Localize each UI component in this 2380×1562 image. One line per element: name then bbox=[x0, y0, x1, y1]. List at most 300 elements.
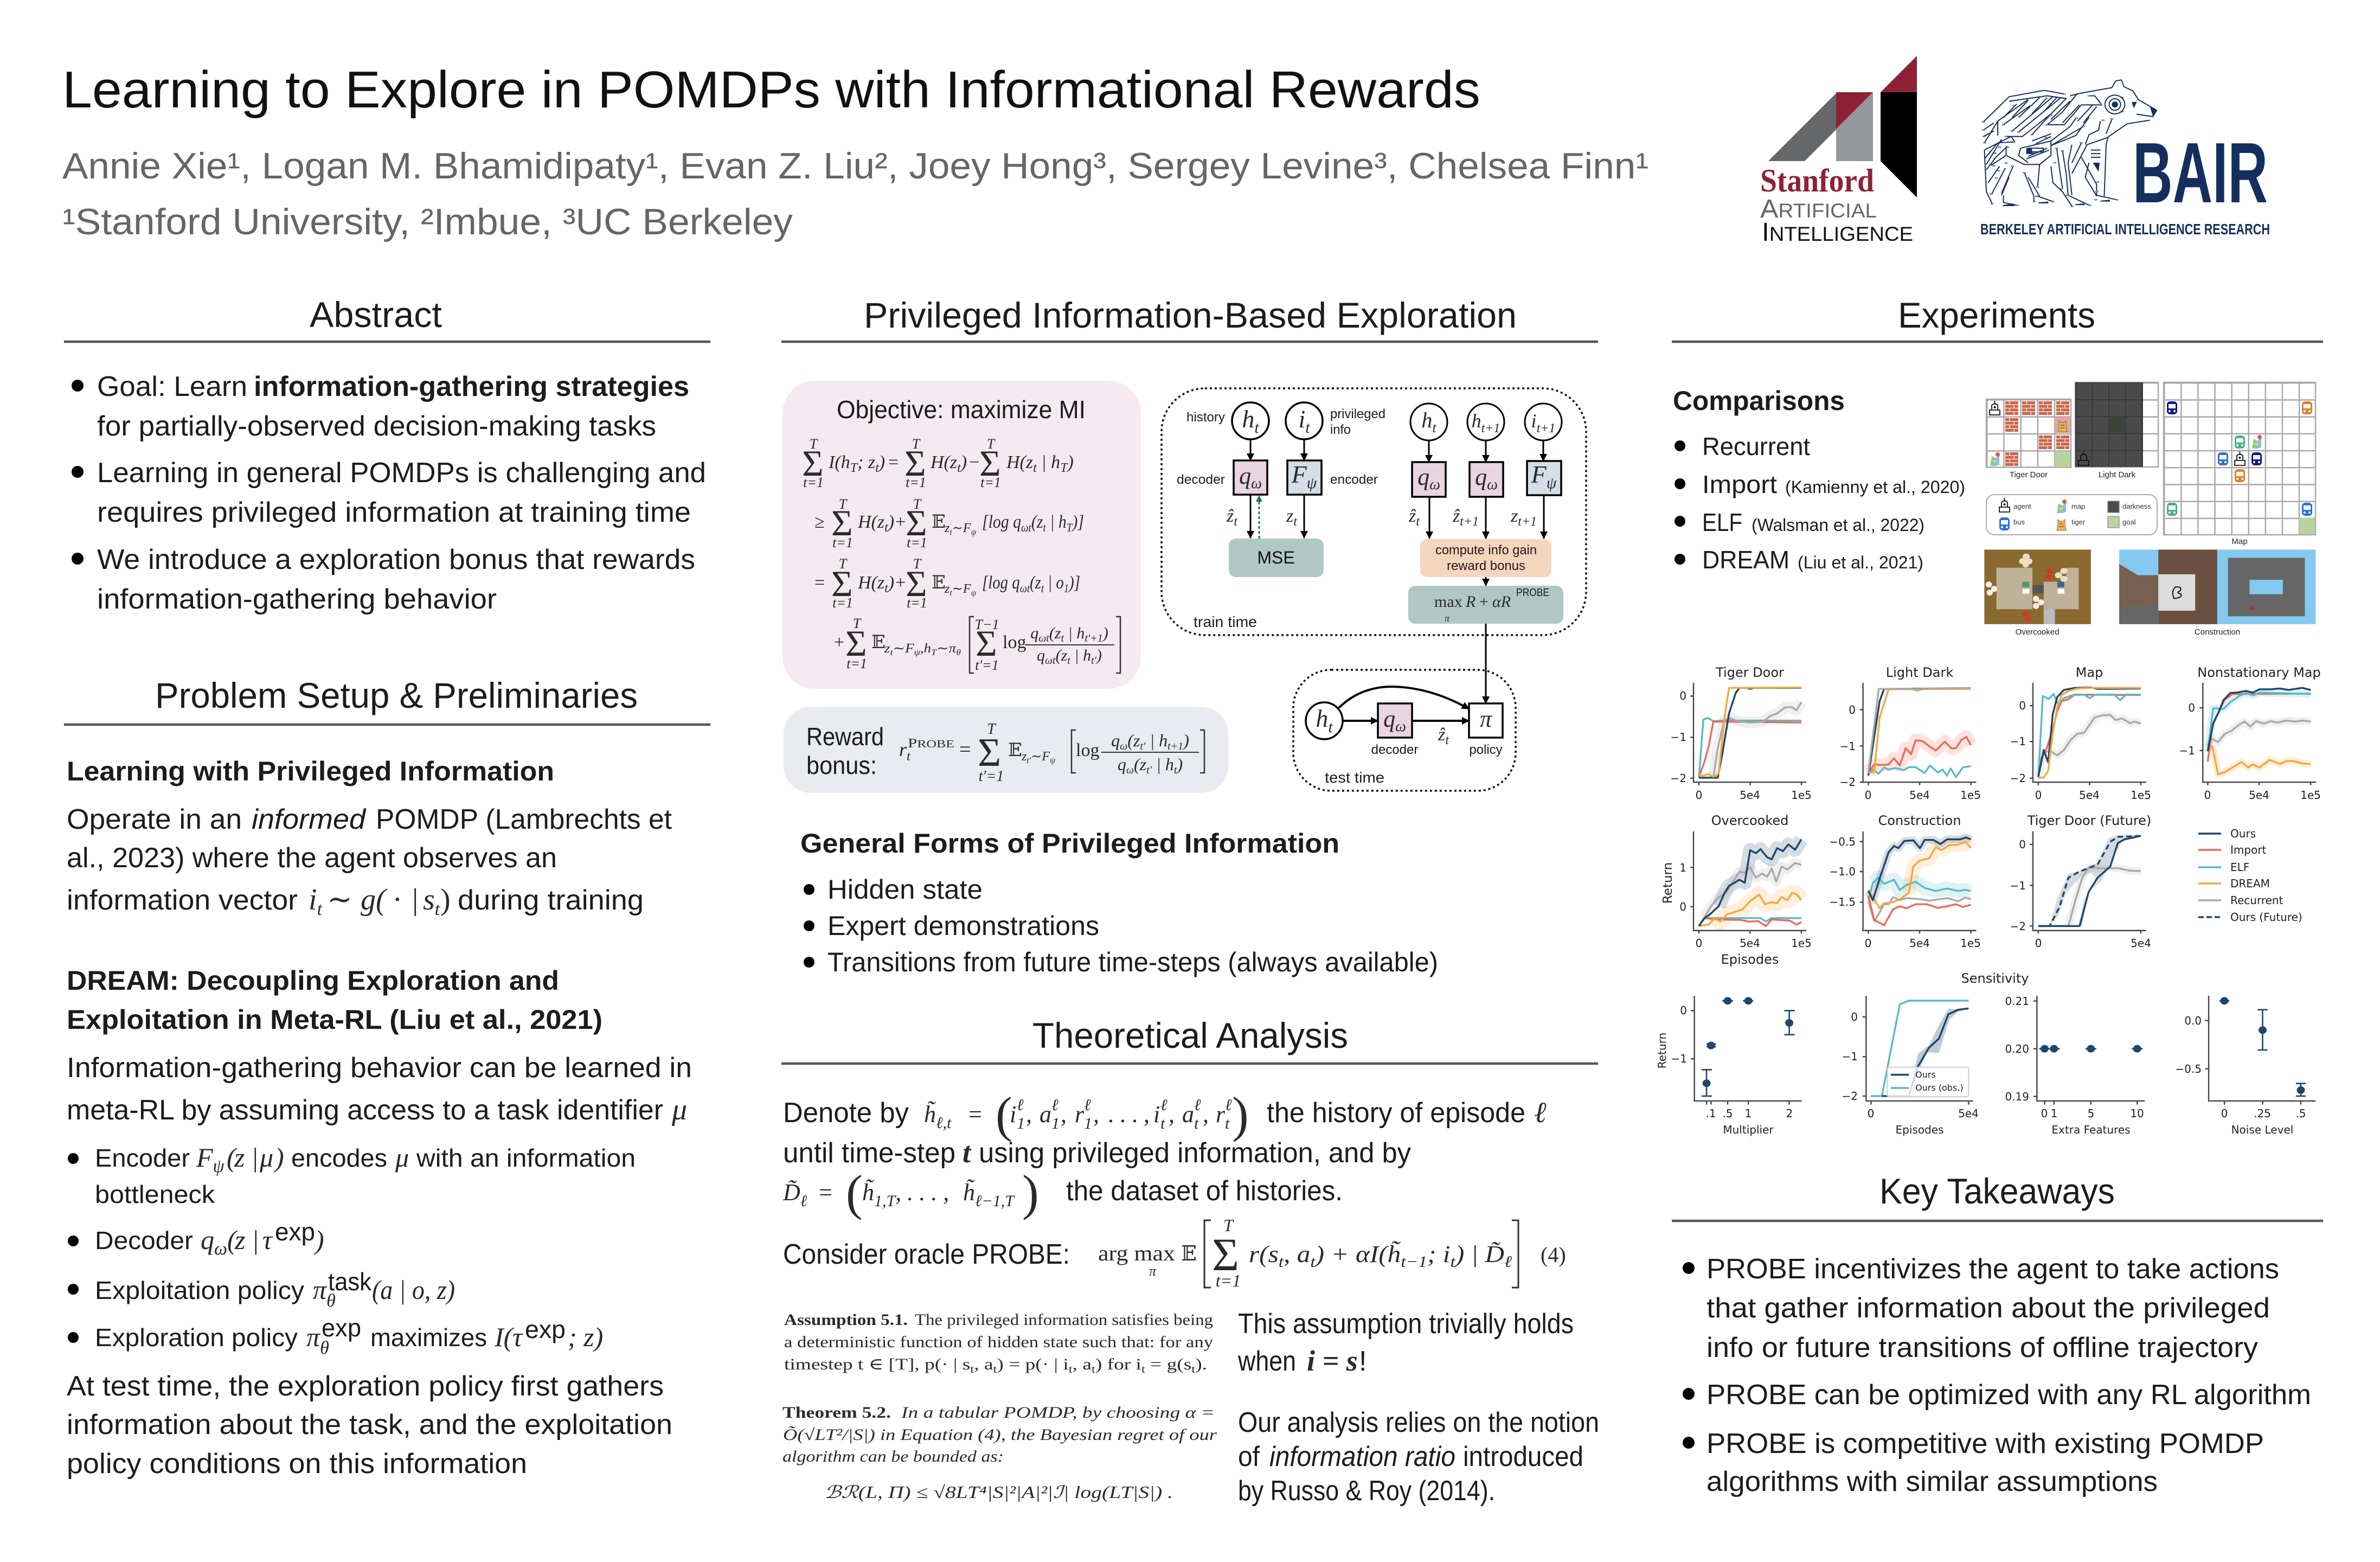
legend: environment icons bbox=[1986, 495, 2157, 535]
left pipeline: z bbox=[1286, 506, 1293, 526]
equation line 1: ) bbox=[1066, 452, 1074, 472]
chart: Nonstationary Map: Nonstationary Map bbox=[2197, 665, 2321, 680]
text block: key takeaways: algorithms with similar assumptions bbox=[1707, 1466, 2158, 1497]
text block: theorem 5.2: In a tabular POMDP, by choosing α = bbox=[901, 1404, 1215, 1422]
chart: Light Dark: 1e5 bbox=[1960, 789, 1981, 802]
chart: Tiger Door: 0 bbox=[1696, 789, 1702, 802]
chart: Light Dark: Light Dark bbox=[1886, 665, 1953, 680]
equation line 2: T bbox=[839, 496, 848, 512]
chart: Light Dark: −1 bbox=[1840, 740, 1856, 753]
list: DREAM components: Exploitation policy bbox=[95, 1276, 304, 1304]
equation line 4: ) bbox=[1095, 646, 1102, 664]
panel: reward bonus: ψ bbox=[1050, 756, 1056, 765]
text block: history definition: ℓ,t bbox=[936, 1114, 952, 1132]
text block: learning with privileged information: ) bbox=[440, 883, 451, 917]
chart: Overcooked: Return bbox=[1661, 862, 1675, 904]
logo: Stanford Artificial Intelligence bbox=[1760, 56, 1917, 247]
equation line 1: Σ bbox=[802, 443, 824, 484]
equation line 2: H(z bbox=[858, 512, 884, 532]
heading: Theoretical Analysis: Theoretical Analysis bbox=[1032, 1015, 1348, 1055]
text block: assumption 5.1: t bbox=[1191, 1363, 1196, 1375]
text block: learning with privileged information: ∼ bbox=[327, 883, 352, 917]
equation line 1: Σ bbox=[904, 443, 926, 484]
legend: algorithms: Ours bbox=[2230, 827, 2256, 840]
panel: reward bonus: t′ bbox=[1027, 756, 1031, 765]
left pipeline: h bbox=[1242, 405, 1254, 433]
chart: Nonstationary Map: 0 bbox=[2188, 701, 2195, 714]
equation line 4: Σ bbox=[976, 623, 997, 664]
equation line 1: t bbox=[957, 461, 961, 475]
text block: abstract bullets: requires privileged information at training time bbox=[97, 497, 691, 528]
list: DREAM components: maximizes bbox=[370, 1323, 487, 1352]
text block: assumption 5.1: , a bbox=[1073, 1355, 1092, 1373]
text block: oracle PROBE equation: π bbox=[1149, 1263, 1157, 1279]
equation line 1: t=1 bbox=[803, 475, 824, 490]
equation line 4: ωt bbox=[1038, 632, 1049, 644]
equation line 3: = bbox=[814, 573, 825, 593]
text block: oracle PROBE equation: ) + αI(h̃ bbox=[1313, 1241, 1401, 1267]
text block: learning with privileged information: g( bbox=[361, 883, 388, 917]
chart: Multiplier sensitivity: Multiplier bbox=[1723, 1123, 1774, 1136]
text block: learning with privileged information: information vector bbox=[67, 885, 298, 916]
equation line 4: 𝔼 bbox=[871, 632, 886, 652]
equation line 2: | h bbox=[1046, 512, 1067, 532]
right pipeline: reward bonus bbox=[1447, 559, 1525, 573]
equation line 3: 𝔼 bbox=[932, 573, 946, 593]
equation line 1: ) bbox=[960, 452, 967, 472]
text block: history definition: using privileged information, and by bbox=[979, 1137, 1411, 1169]
chart: Noise Level sensitivity: .5 bbox=[2295, 1107, 2306, 1120]
text block: learning with privileged information: POMDP (Lambrechts et bbox=[376, 804, 672, 835]
equation line 1: t bbox=[875, 461, 880, 475]
list: DREAM components: θ bbox=[326, 1291, 336, 1311]
text block: oracle PROBE equation: ) | D̃ bbox=[1453, 1241, 1504, 1267]
text block: key takeaways: info or future transitions of offline trajectory bbox=[1707, 1332, 2258, 1363]
equation line 2: t=1 bbox=[907, 535, 927, 550]
panel: objective maximize MI: Objective: maximize MI bbox=[837, 395, 1086, 424]
right pipeline: compute info gain bbox=[1435, 543, 1537, 558]
heading: Problem Setup & Preliminaries: Problem Setup & Preliminaries bbox=[155, 675, 638, 715]
text block: history definition: ℓ−1,T bbox=[975, 1192, 1015, 1210]
chart: Multiplier sensitivity: 1 bbox=[1745, 1107, 1752, 1120]
text block: history definition: i bbox=[1010, 1101, 1016, 1128]
right pipeline: i bbox=[1531, 410, 1537, 432]
text block: history definition: ℓ bbox=[1051, 1096, 1059, 1114]
text block: learning with privileged information: t bbox=[435, 899, 441, 919]
text block: learning with privileged information: al., 2023) where the agent observes an bbox=[67, 842, 557, 874]
panel: reward bonus: 𝔼 bbox=[1008, 740, 1022, 760]
right pipeline: t+1 bbox=[1460, 515, 1479, 529]
panel: reward bonus: ) bbox=[1176, 754, 1183, 774]
text block: history definition: = bbox=[968, 1101, 982, 1128]
chart: Light Dark: 5e4 bbox=[1909, 789, 1930, 802]
text block: history definition: 1 bbox=[1051, 1115, 1060, 1132]
text block: key takeaways: PROBE can be optimized with any RL algorithm bbox=[1707, 1379, 2311, 1411]
right pipeline: t+1 bbox=[1481, 421, 1500, 436]
chart: Noise Level sensitivity bbox=[2175, 996, 2315, 1136]
text block: history definition: ( bbox=[846, 1165, 863, 1220]
equation line 4: ) bbox=[1102, 624, 1108, 642]
equation line 1: T bbox=[1060, 461, 1068, 475]
chart: Noise Level sensitivity: Noise Level bbox=[2231, 1123, 2293, 1136]
text block: abstract bullets bbox=[72, 371, 706, 615]
text block: learning with privileged information: during training bbox=[458, 885, 644, 916]
equation line 3: + bbox=[895, 573, 906, 593]
right pipeline: ψ bbox=[1547, 474, 1557, 492]
equation line 2: ) bbox=[887, 512, 894, 532]
equation line 1: Σ bbox=[979, 443, 1001, 484]
list: DREAM components: Encoder bbox=[95, 1144, 190, 1172]
text block: DREAM: information about the task, and the exploitation bbox=[67, 1409, 672, 1441]
equation line 2: T bbox=[913, 496, 922, 512]
equation line 2: )] bbox=[1072, 512, 1084, 532]
equation line 1: H(z bbox=[931, 452, 957, 472]
right pipeline: t bbox=[1432, 420, 1436, 436]
text block: oracle PROBE equation: Consider oracle PROBE: bbox=[783, 1239, 1070, 1270]
text block: history definition: ℓ bbox=[1225, 1096, 1232, 1114]
text block: key takeaways: that gather information about the privileged bbox=[1707, 1292, 2270, 1324]
list: DREAM components: | bbox=[252, 1225, 259, 1255]
equation line 1: T bbox=[850, 461, 858, 475]
text block: general forms of privileged information bbox=[800, 828, 1438, 977]
panel: objective maximize MI bbox=[782, 381, 1141, 689]
chart: Tiger Door (Future): 0 bbox=[2035, 937, 2042, 950]
panel: reward bonus: T bbox=[987, 721, 997, 738]
equation line 3: t bbox=[950, 588, 952, 598]
panel: reward bonus: (z bbox=[1134, 754, 1147, 774]
text block: assumption 5.1: The privileged information satisfies being bbox=[915, 1311, 1213, 1329]
text block: oracle PROBE equation bbox=[783, 1215, 1566, 1290]
equation line 3: ) bbox=[887, 573, 894, 593]
text block: history definition: a bbox=[1182, 1101, 1194, 1128]
list: DREAM components: τ bbox=[262, 1225, 273, 1255]
text block: theorem 5.2: Õ(√LT²/|S|) in Equation (4), the Bayesian regret of our bbox=[783, 1426, 1217, 1444]
chart: Noise Level sensitivity: −0.5 bbox=[2175, 1062, 2202, 1076]
diagram: test time: t bbox=[1445, 733, 1449, 747]
list: DREAM components: ( bbox=[227, 1225, 238, 1255]
chart: Tiger Door: −1 bbox=[1671, 731, 1686, 744]
equation line 2 bbox=[814, 496, 1084, 550]
text block: assumption note bbox=[1237, 1308, 1574, 1377]
equation line 1: ) bbox=[878, 452, 885, 472]
right pipeline: ẑ bbox=[1453, 506, 1460, 526]
chart: Episodes sensitivity: 0 bbox=[1851, 1010, 1858, 1023]
list: DREAM components: z bbox=[234, 1142, 245, 1173]
text block: history definition: t bbox=[1160, 1115, 1165, 1132]
list: DREAM components: ψ bbox=[213, 1156, 225, 1176]
diagram: train time bbox=[1162, 388, 1586, 635]
list: DREAM components: | bbox=[251, 1142, 259, 1173]
diagram: test time: q bbox=[1383, 706, 1395, 732]
equation line 1: t=1 bbox=[906, 475, 926, 490]
chart: Map: Map bbox=[2076, 665, 2103, 680]
equation line 3: )] bbox=[1068, 573, 1080, 593]
panel: reward bonus: t bbox=[907, 750, 911, 764]
list: DREAM components: ) bbox=[273, 1142, 284, 1173]
list: DREAM components: ; z) bbox=[568, 1322, 603, 1352]
text block: DREAM: DREAM: Decoupling Exploration and bbox=[67, 965, 559, 996]
equation line 1: t bbox=[1033, 461, 1037, 475]
equation line 1 bbox=[802, 436, 1074, 490]
chart: Map: 5e4 bbox=[2079, 789, 2100, 802]
right pipeline: π bbox=[1445, 613, 1450, 624]
equation line 3: | o bbox=[1044, 573, 1064, 593]
equation line 4: t′ bbox=[1091, 655, 1097, 667]
logo: BAIR bear: BAIR bbox=[2133, 125, 2268, 221]
equation line 3: Σ bbox=[906, 563, 927, 604]
right pipeline: ω bbox=[1429, 476, 1440, 493]
text block: assumption 5.1: ) = p(· | i bbox=[997, 1355, 1069, 1373]
right pipeline: t bbox=[1416, 515, 1420, 529]
text block: history definition: , bbox=[1093, 1101, 1099, 1128]
list: DREAM components: encodes bbox=[291, 1144, 387, 1172]
text block: learning with privileged information bbox=[67, 756, 672, 919]
equation line 4: T−1 bbox=[974, 617, 999, 632]
text block: comparisons: Import bbox=[1702, 470, 1777, 498]
panel: reward bonus bbox=[784, 707, 1228, 793]
text block: history definition: r bbox=[1216, 1101, 1226, 1128]
text block: DREAM: Exploitation in Meta-RL (Liu et al., 2021) bbox=[67, 1004, 602, 1035]
text block: history definition: ℓ bbox=[1084, 1096, 1091, 1114]
equation line 3: 1 bbox=[1064, 581, 1069, 595]
heading: Experiments: Experiments bbox=[1898, 295, 2095, 335]
text block: oracle PROBE equation: t bbox=[1279, 1253, 1284, 1271]
panel: reward bonus: Reward bbox=[806, 722, 884, 751]
text block: comparisons: (Liu et al., 2021) bbox=[1798, 553, 1923, 572]
right pipeline: t+1 bbox=[1518, 515, 1537, 529]
equation line 1: T bbox=[912, 436, 921, 452]
equation line 4: | h bbox=[1064, 624, 1085, 642]
chart: Noise Level sensitivity: 0.0 bbox=[2184, 1014, 2202, 1027]
logo: Stanford Artificial Intelligence: INTELLIGENCE bbox=[1762, 218, 1913, 247]
equation line 3: H(z bbox=[858, 573, 884, 593]
text block: theorem note bbox=[1238, 1407, 1599, 1507]
left pipeline: t bbox=[1254, 419, 1259, 437]
chart: Construction bbox=[1829, 813, 1981, 950]
right pipeline bbox=[1408, 404, 1563, 624]
chart: Construction: Construction bbox=[1878, 813, 1961, 828]
text block: oracle PROBE equation: r(s bbox=[1249, 1241, 1275, 1267]
text block: key takeaways: PROBE is competitive with existing POMDP bbox=[1707, 1428, 2264, 1459]
equation line 4: t bbox=[890, 648, 893, 657]
equation line 4 bbox=[834, 616, 1120, 673]
equation line 3: z bbox=[945, 582, 950, 596]
text block: history definition: h̃ bbox=[924, 1101, 936, 1128]
equation line 3: [log q bbox=[982, 573, 1027, 593]
text block: history definition: = bbox=[819, 1179, 832, 1206]
text block: oracle PROBE equation: t bbox=[1451, 1253, 1456, 1271]
environment: Map: Map bbox=[2231, 537, 2248, 546]
heading: Abstract: Abstract bbox=[310, 295, 442, 335]
text block: learning with privileged information: i bbox=[309, 883, 317, 917]
equation line 1: t=1 bbox=[980, 475, 1001, 490]
list: DREAM components: π bbox=[313, 1275, 326, 1305]
text block: history definition: t bbox=[963, 1136, 972, 1169]
equation line 2: T bbox=[1067, 521, 1073, 534]
text block: assumption 5.1: t bbox=[1141, 1363, 1145, 1375]
text block: theorem 5.2: ℬℛ(L, Π) ≤ √8LT⁴|S|²|A|²|ℐ| log(LT|S|) . bbox=[824, 1482, 1173, 1502]
chart: Extra Features sensitivity: 0.20 bbox=[2005, 1042, 2029, 1055]
panel: reward bonus: PROBE bbox=[908, 737, 954, 751]
text block: assumption 5.1: t bbox=[993, 1363, 997, 1375]
text block: history definition: D̃ bbox=[783, 1179, 800, 1206]
diagram: test time: ω bbox=[1395, 718, 1406, 735]
equation line 4: t bbox=[1061, 632, 1064, 644]
left pipeline: F bbox=[1292, 460, 1307, 488]
chart: Construction: 0 bbox=[1865, 937, 1871, 950]
equation line 3: Σ bbox=[831, 563, 853, 604]
panel: reward bonus: = bbox=[959, 738, 971, 761]
text block: assumption note: when bbox=[1237, 1346, 1296, 1377]
equation line 4: T bbox=[931, 648, 937, 657]
left pipeline: t bbox=[1305, 419, 1310, 437]
text block: oracle PROBE equation: ; i bbox=[1427, 1241, 1451, 1267]
equation line 2: Σ bbox=[831, 502, 853, 543]
text block: history definition: , bbox=[1169, 1101, 1175, 1128]
chart: Episodes sensitivity: 5e4 bbox=[1958, 1107, 1979, 1120]
legend: environment icons: agent bbox=[2013, 502, 2031, 510]
right pipeline: ω bbox=[1487, 476, 1498, 493]
text block: general forms of privileged information: General Forms of Privileged Information bbox=[800, 828, 1339, 859]
legend: environment icons: goal bbox=[2122, 518, 2136, 526]
environment: Tiger Door: Tiger Door bbox=[2010, 470, 2048, 479]
text block: history definition: , bbox=[1026, 1101, 1032, 1128]
diagram: test time bbox=[1293, 670, 1516, 791]
chart: Overcooked: 1e5 bbox=[1791, 937, 1812, 950]
text block: learning with privileged information: informed bbox=[252, 804, 367, 835]
right pipeline: ẑ bbox=[1409, 506, 1416, 526]
list: DREAM components: θ bbox=[320, 1338, 329, 1358]
list: DREAM components: q bbox=[201, 1225, 214, 1255]
left pipeline bbox=[1177, 402, 1385, 577]
text block: oracle PROBE equation: ℓ bbox=[1504, 1253, 1512, 1271]
list: DREAM components: μ bbox=[259, 1142, 273, 1173]
left pipeline: t bbox=[1234, 515, 1238, 529]
chart: Extra Features sensitivity: 0.21 bbox=[2005, 995, 2029, 1008]
environment: Light Dark bbox=[2075, 382, 2158, 479]
text block: history definition: h̃ bbox=[862, 1179, 874, 1206]
text block: oracle PROBE equation: 𝔼 bbox=[1181, 1243, 1197, 1265]
text block: history definition: ℓ bbox=[1194, 1096, 1201, 1114]
equation line 2: (z bbox=[1031, 512, 1043, 532]
chart: Construction: −0.5 bbox=[1829, 835, 1856, 848]
chart: Episodes sensitivity: Ours bbox=[1915, 1070, 1936, 1080]
chart: Episodes sensitivity: Episodes bbox=[1896, 1123, 1943, 1136]
text block: learning with privileged information: s bbox=[423, 883, 435, 917]
panel: reward bonus: | h bbox=[1145, 731, 1167, 750]
panel: reward bonus: (z bbox=[1127, 731, 1140, 750]
legend: environment icons: tiger bbox=[2071, 518, 2086, 526]
equation line 4: (z bbox=[1056, 646, 1068, 664]
text block: DREAM: Information-gathering behavior can be learned in bbox=[67, 1052, 692, 1084]
right pipeline: F bbox=[1531, 460, 1547, 488]
text block: theorem 5.2: algorithm can be bounded as: bbox=[782, 1448, 1004, 1465]
right pipeline: PROBE bbox=[1516, 587, 1549, 599]
text block: history definition: 1 bbox=[1017, 1115, 1025, 1132]
equation line 4: q bbox=[1037, 646, 1045, 664]
environment: Map bbox=[2164, 382, 2315, 546]
panel: reward bonus: ω bbox=[1126, 764, 1134, 776]
panel: reward bonus: q bbox=[1118, 754, 1126, 774]
legend: environment icons: bus bbox=[2013, 518, 2025, 526]
diagram: test time: π bbox=[1480, 706, 1493, 732]
text block: abstract bullets: Goal: Learn bbox=[97, 371, 247, 402]
chart: Overcooked: 0 bbox=[1679, 900, 1686, 913]
text block: learning with privileged information: Learning with Privileged Information bbox=[67, 756, 554, 786]
text block: comparisons: (Walsman et al., 2022) bbox=[1752, 515, 1924, 535]
left pipeline: q bbox=[1239, 463, 1251, 489]
logo: BAIR bear: BERKELEY ARTIFICIAL INTELLIGENCE RESEARCH bbox=[1980, 221, 2270, 238]
chart: Nonstationary Map: 5e4 bbox=[2249, 789, 2269, 802]
environment: Construction: Construction bbox=[2195, 628, 2240, 637]
logo: Stanford Artificial Intelligence: ARTIFICIAL bbox=[1760, 195, 1877, 223]
equation line 1: H(z bbox=[1006, 452, 1033, 472]
right pipeline: αR bbox=[1492, 593, 1511, 611]
list: DREAM components: task bbox=[328, 1267, 372, 1296]
chart: Tiger Door: −2 bbox=[1671, 772, 1686, 785]
left pipeline: i bbox=[1298, 405, 1305, 433]
chart: Light Dark bbox=[1840, 665, 1981, 802]
title: Learning to Explore in POMDPs with Informational Rewards bbox=[62, 61, 1480, 119]
chart: Multiplier sensitivity: .1 bbox=[1705, 1107, 1716, 1120]
text block: oracle PROBE equation: (4) bbox=[1541, 1243, 1566, 1267]
equation line 3: t bbox=[1041, 581, 1044, 595]
text block: history definition: the history of episode bbox=[1267, 1097, 1525, 1129]
equation line 4: + bbox=[834, 632, 844, 652]
equation line 4: | h bbox=[1070, 646, 1091, 664]
list: DREAM components: I(τ bbox=[494, 1322, 523, 1352]
text block: assumption 5.1: ). bbox=[1195, 1355, 1207, 1373]
chart: Multiplier sensitivity bbox=[1656, 996, 1802, 1136]
chart: Noise Level sensitivity: 0 bbox=[2221, 1107, 2228, 1120]
equation line 4: t bbox=[1067, 655, 1070, 667]
chart: Construction: −1.0 bbox=[1829, 865, 1856, 878]
right pipeline: z bbox=[1511, 506, 1518, 526]
equation line 3: t=1 bbox=[907, 595, 927, 611]
chart: Nonstationary Map: 0 bbox=[2204, 789, 2211, 802]
text block: assumption 5.1: t bbox=[970, 1363, 974, 1375]
chart: Noise Level sensitivity: .25 bbox=[2254, 1107, 2271, 1120]
panel: reward bonus: Σ bbox=[978, 731, 1001, 775]
chart: Multiplier sensitivity: Return bbox=[1656, 1033, 1669, 1068]
equation line 3: ∼F bbox=[952, 582, 971, 596]
heading: Sensitivity: Sensitivity bbox=[1961, 971, 2029, 986]
heading: Key Takeaways: Key Takeaways bbox=[1879, 1171, 2115, 1211]
text block: oracle PROBE equation: Σ bbox=[1212, 1228, 1239, 1281]
diagram: test time: t bbox=[1328, 718, 1333, 736]
text block: history definition: ℓ bbox=[1160, 1096, 1167, 1114]
chart: Overcooked: 5e4 bbox=[1740, 937, 1760, 950]
text block: theorem 5.2 bbox=[782, 1404, 1217, 1502]
equation line 1: = bbox=[888, 452, 899, 472]
chart: Map bbox=[2010, 665, 2151, 802]
panel: reward bonus: t′ bbox=[1140, 740, 1146, 752]
equation line 3: t=1 bbox=[832, 595, 853, 611]
equation line 3: ωt bbox=[1020, 581, 1030, 595]
environment: Overcooked: Overcooked bbox=[2016, 628, 2059, 637]
text block: learning with privileged information: t bbox=[317, 899, 323, 919]
chart: Episodes sensitivity: −2 bbox=[1842, 1090, 1858, 1103]
chart: Extra Features sensitivity: Extra Features bbox=[2051, 1123, 2131, 1136]
chart: Tiger Door bbox=[1671, 665, 1812, 802]
diagram: test time: test time bbox=[1325, 769, 1384, 786]
equation line 2: z bbox=[945, 521, 950, 535]
legend: algorithms: DREAM bbox=[2230, 877, 2270, 890]
text block: history definition: ℓ bbox=[1017, 1096, 1024, 1114]
text block: history definition: , bbox=[1203, 1101, 1209, 1128]
text block: theorem note: of bbox=[1238, 1441, 1260, 1473]
left pipeline: MSE bbox=[1257, 548, 1295, 567]
